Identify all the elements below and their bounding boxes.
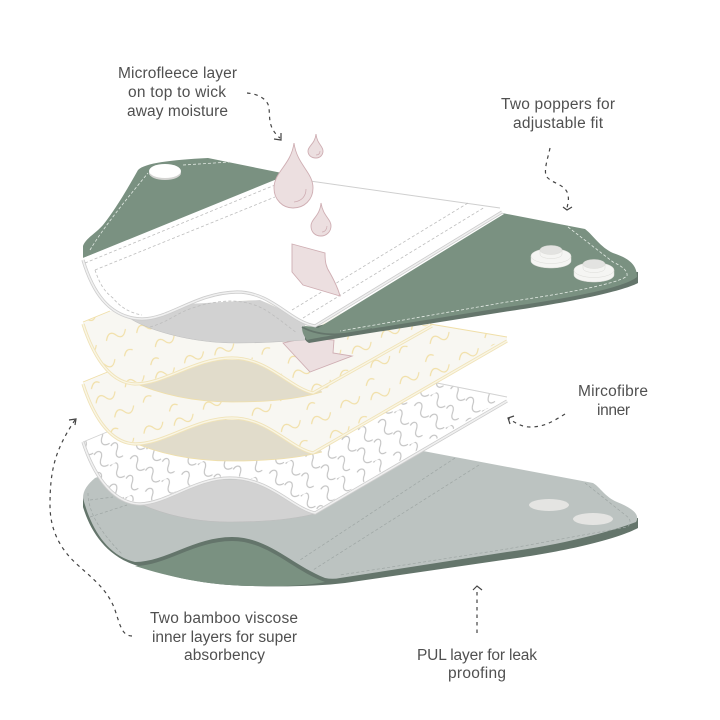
label: microfibre: inner	[597, 402, 630, 419]
PUL green underside	[135, 541, 325, 586]
right green wing	[302, 213, 637, 340]
bamboo 1 beige inner	[128, 360, 322, 402]
arrow: to bamboo layers	[50, 419, 132, 636]
PUL underside edge	[83, 498, 638, 586]
label: bamboo	[150, 610, 298, 664]
right poppers	[531, 246, 614, 282]
bamboo viscose layer 1	[83, 300, 432, 402]
PUL popper holes	[529, 499, 613, 525]
PUL top face	[83, 440, 637, 579]
white layer stitching	[85, 185, 485, 318]
bamboo 2 top face	[83, 324, 507, 453]
falling fold arrow body	[292, 244, 340, 296]
white top face	[83, 177, 502, 326]
label: microfleece	[118, 65, 237, 120]
arrow: to poppers	[545, 148, 572, 210]
label: bamboo: absorbency	[184, 647, 265, 664]
grey inner stitching	[150, 301, 297, 333]
label: microfibre: Mircofibre	[578, 383, 648, 400]
microfibre edge	[83, 383, 507, 513]
label: bamboo: Two bamboo viscose	[150, 610, 298, 627]
arrow: to drops	[247, 93, 281, 140]
right green wing edge	[302, 272, 638, 343]
label: microfleece: away moisture	[127, 103, 228, 120]
arrow: to microfibre	[508, 414, 565, 427]
label: PUL: proofing	[448, 665, 506, 682]
bamboo 1 top face	[83, 300, 432, 393]
bottom PUL layer	[83, 440, 638, 586]
middle drop	[311, 203, 331, 236]
microfibre top face	[83, 383, 507, 513]
bamboo 2 waves	[83, 324, 507, 451]
bamboo 1 edge	[83, 311, 432, 393]
top microfleece layer	[83, 158, 638, 343]
microfibre squiggles	[83, 383, 507, 511]
wing fold shadow	[302, 327, 372, 334]
label: bamboo: inner layers for super	[152, 629, 297, 646]
bamboo 1 waves	[83, 300, 430, 391]
label: PUL	[417, 647, 537, 682]
microfibre layer	[83, 383, 507, 522]
bamboo 2 beige inner	[128, 420, 322, 461]
green wing stitching	[90, 162, 627, 331]
back green wing	[83, 158, 282, 258]
large drop	[274, 143, 313, 208]
pink down arrow	[283, 338, 352, 372]
white edge band	[83, 177, 502, 326]
grey inner	[125, 300, 305, 343]
label: PUL: PUL layer for leak	[417, 647, 537, 664]
label: microfibre	[578, 383, 648, 419]
bamboo 2 edge	[83, 324, 507, 453]
PUL stitching	[88, 458, 630, 575]
left popper	[149, 164, 181, 180]
water drops	[274, 134, 340, 296]
label: poppers	[501, 96, 615, 132]
bamboo viscose layer 2	[83, 324, 507, 461]
arrow: to PUL	[473, 586, 482, 633]
small drop	[308, 134, 323, 158]
label: microfleece: on top to wick	[128, 84, 226, 101]
label: poppers: Two poppers for	[501, 96, 615, 113]
microfibre grey inner	[128, 480, 318, 522]
label: poppers: adjustable fit	[513, 115, 604, 132]
label: microfleece: Microfleece layer	[118, 65, 237, 82]
